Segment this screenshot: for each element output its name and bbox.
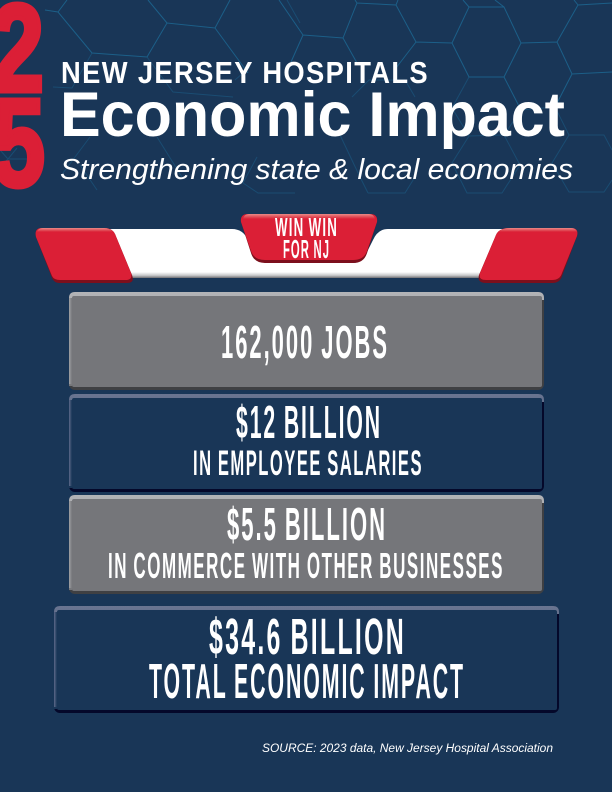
panel: jobs [69,292,544,390]
left red parallelogram [36,228,133,283]
right red parallelogram [479,228,577,283]
source note: SOURCE: 2023 data, New Jersey Hospital Association [262,743,553,755]
panel: total impact [54,606,559,713]
panel: total impact: $34.6 BILLION [209,608,406,665]
panel: jobs: 162,000 JOBS [221,316,389,368]
banner label: FOR NJ [283,234,330,264]
panel: commerce: $5.5 BILLION [227,498,387,550]
subtitle: Strengthening state & local economies [60,154,573,186]
title block [60,55,573,186]
center red tab [241,214,377,263]
heading: Economic Impact: Economic Impact [60,80,565,150]
big red number 25 [0,0,45,213]
white banner band [100,229,520,278]
heading: New Jersey Hospitals: NEW JERSEY HOSPITALS [61,55,429,90]
hexagon network pattern [0,0,612,193]
banner label [275,212,338,264]
panel: salaries: $12 BILLION [236,396,382,448]
panel: salaries [69,394,544,492]
panel: commerce [69,495,544,594]
banner: win win for NJ [36,212,577,283]
banner label: WIN WIN [275,212,338,242]
